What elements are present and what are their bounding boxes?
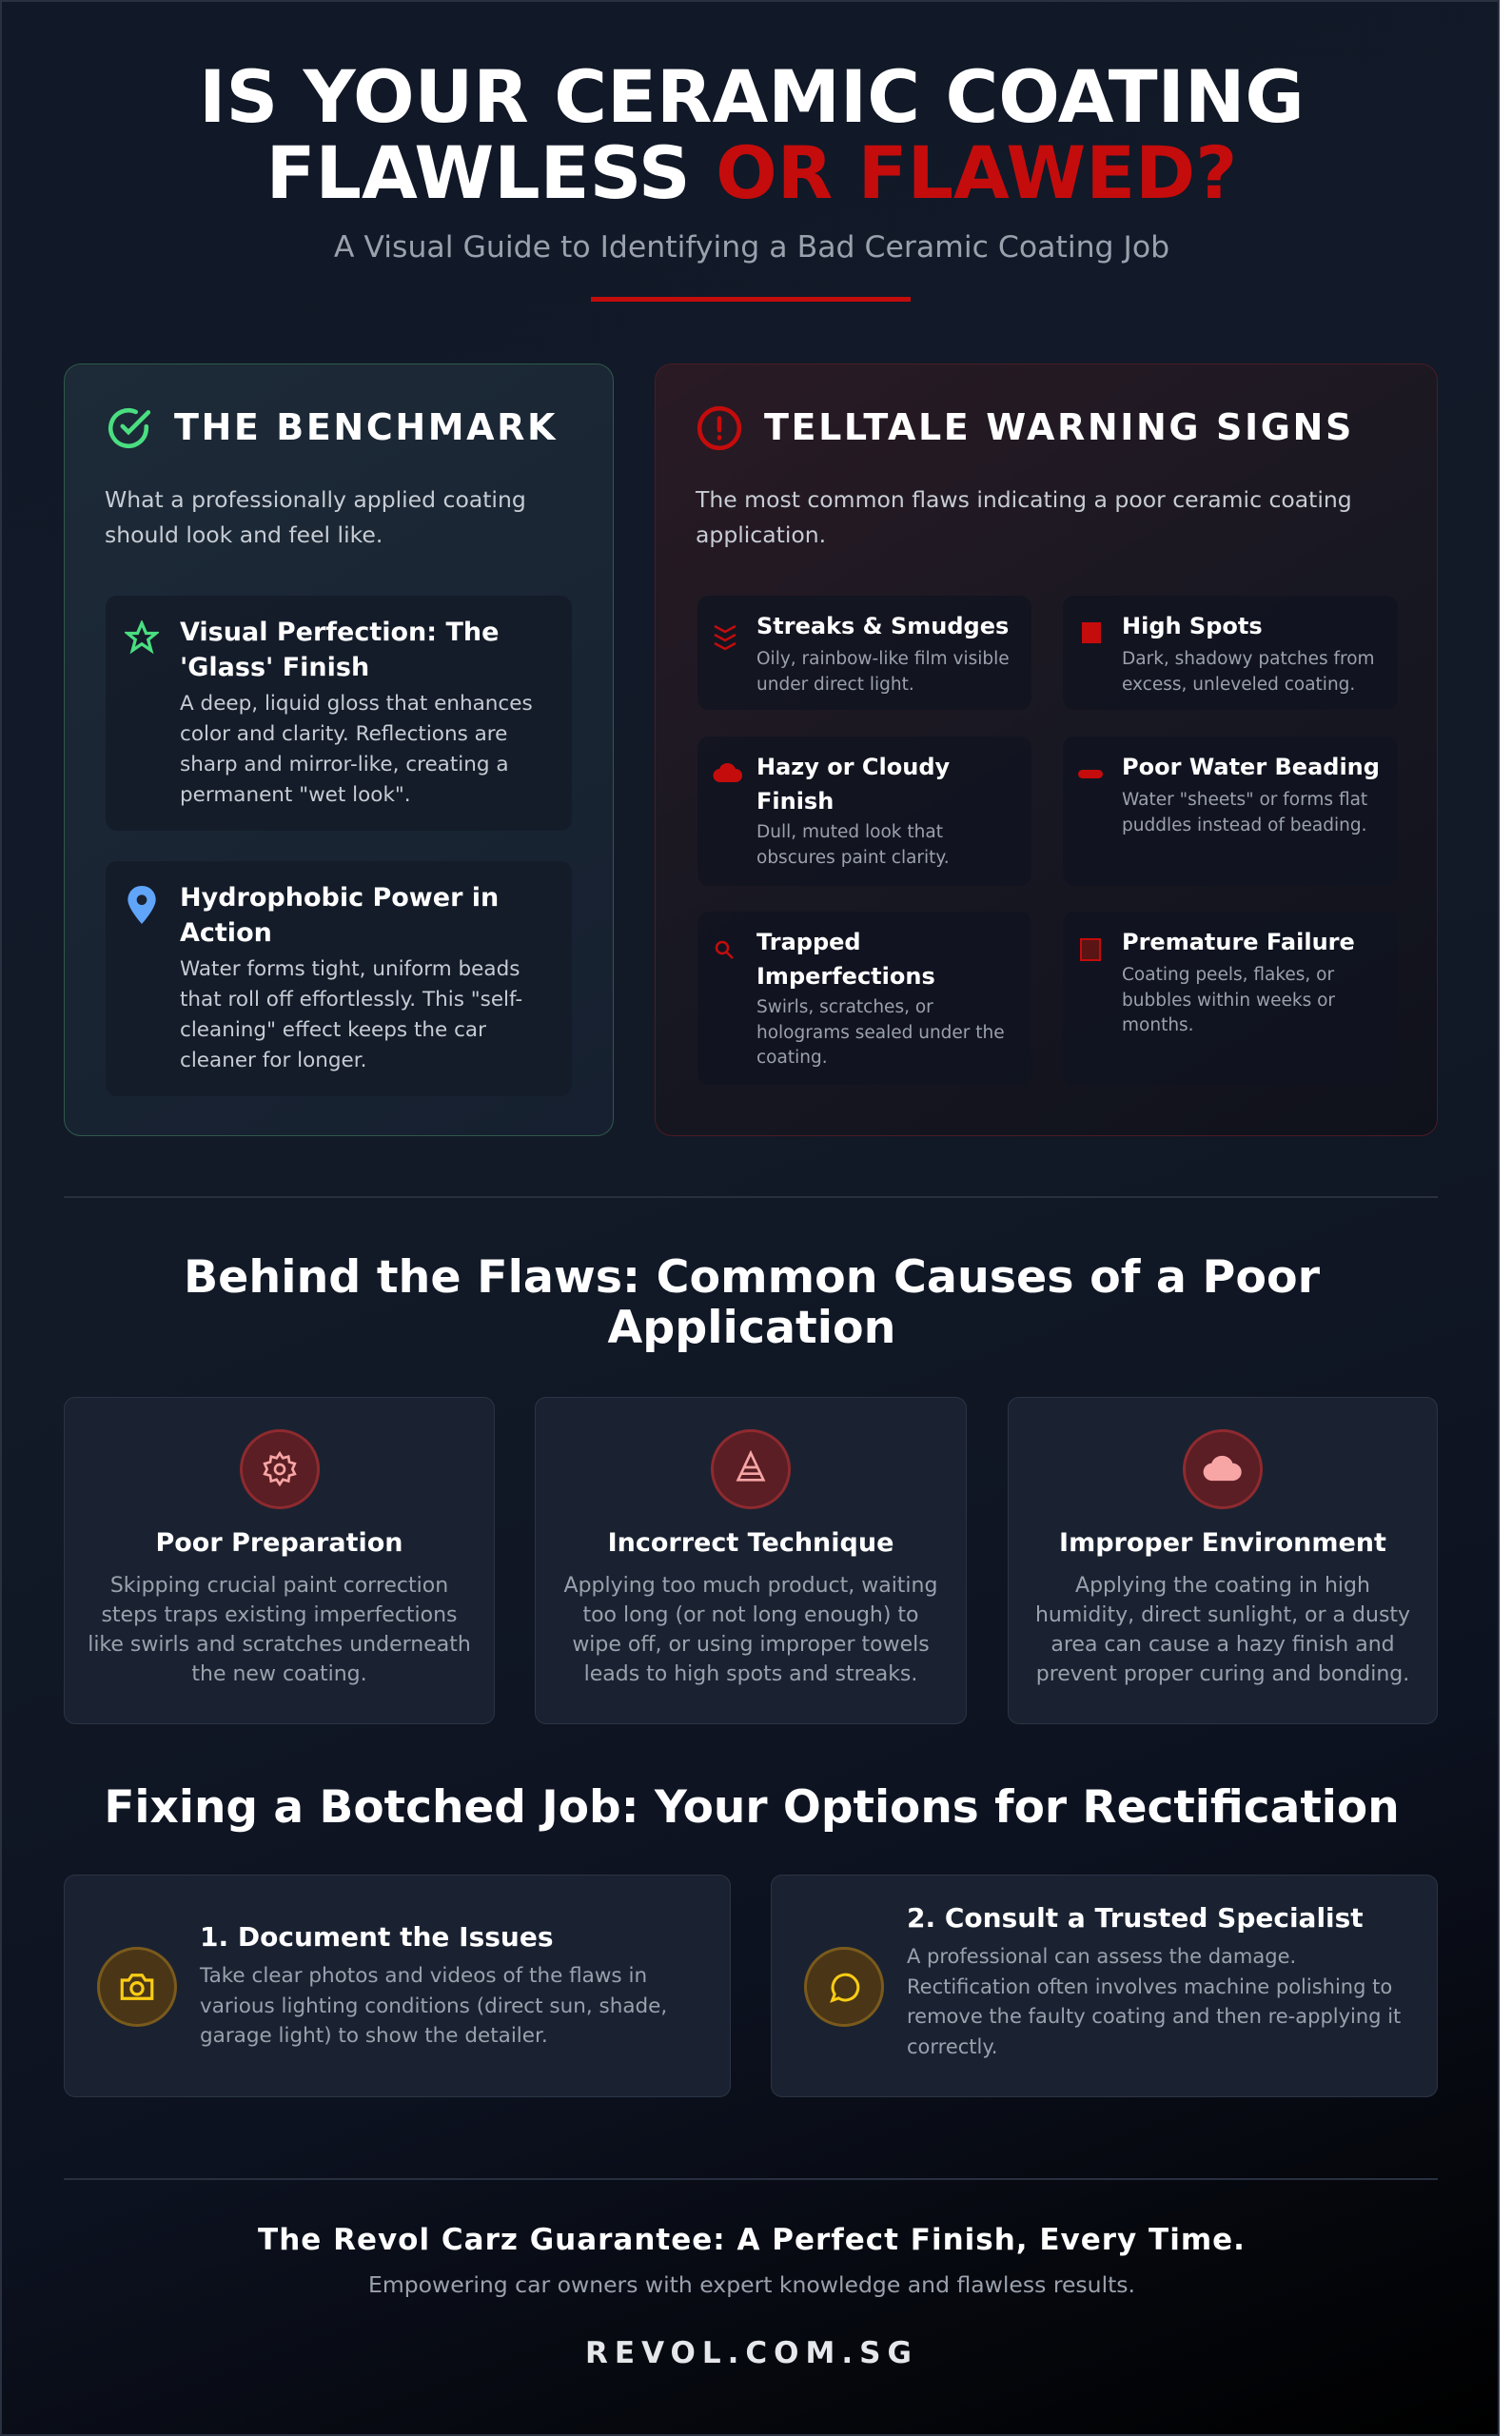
heading: causes: Application bbox=[607, 1302, 895, 1354]
cause: poor preparation bbox=[64, 1397, 495, 1724]
icon: gear bbox=[240, 1429, 320, 1509]
fix: consult: A professional can assess the damage. Rectification often involves machine polishing to remove the faulty coating and then re-applying it correctly. bbox=[907, 1945, 1401, 2057]
icon: magnifier bbox=[716, 940, 734, 959]
cause: improper environment: Applying the coating in high humidity, direct sunlight, or a dusty area can cause a hazy finish and prevent proper curing and bonding. bbox=[1035, 1574, 1410, 1686]
warning: high spots: Dark, shadowy patches from excess, unleveled coating. bbox=[1122, 649, 1375, 695]
red underline bbox=[591, 297, 911, 302]
warning: hazy: Hazy or Cloudy Finish bbox=[756, 754, 950, 815]
icon: chat bubble bbox=[804, 1947, 884, 2027]
fix: consult: 2. Consult a Trusted Specialist bbox=[907, 1902, 1364, 1934]
cause: incorrect technique bbox=[535, 1397, 967, 1724]
icon: map pin bbox=[128, 886, 156, 924]
warning: trapped imperfections: Swirls, scratches, or holograms sealed under the coating. bbox=[756, 997, 1005, 1068]
icon: square bbox=[1082, 622, 1101, 643]
warning: water beading bbox=[1063, 737, 1398, 886]
footer: tagline: Empowering car owners with expert knowledge and flawless results. bbox=[368, 2271, 1135, 2298]
warning: trapped imperfections bbox=[697, 912, 1031, 1085]
warning: high spots bbox=[1063, 596, 1398, 710]
warning: water beading: Poor Water Beading bbox=[1122, 754, 1380, 780]
icon: outlined square bbox=[1080, 938, 1101, 961]
card: visual perfection bbox=[106, 596, 572, 831]
warning: hazy bbox=[697, 737, 1031, 886]
icon: chevrons bbox=[714, 624, 736, 651]
icon: check circle bbox=[108, 407, 150, 449]
cause: poor preparation: Skipping crucial paint correction steps traps existing imperfections like swirls and scratches underneath the new coating. bbox=[88, 1574, 471, 1686]
footer: guarantee: The Revol Carz Guarantee: A Perfect Finish, Every Time. bbox=[258, 2223, 1246, 2257]
title: FLAWLESS OR FLAWED? bbox=[266, 130, 1237, 215]
fix: consult bbox=[771, 1875, 1438, 2097]
title: IS YOUR CERAMIC COATING bbox=[199, 54, 1305, 139]
title bbox=[199, 54, 1305, 215]
cause: poor preparation: Poor Preparation bbox=[155, 1528, 403, 1558]
icon: camera bbox=[97, 1947, 177, 2027]
warning: streaks: Oily, rainbow-like film visible under direct light. bbox=[756, 649, 1010, 695]
icon: alert circle bbox=[697, 405, 742, 451]
heading: fixing: Fixing a Botched Job: Your Options for Rectification bbox=[104, 1781, 1400, 1834]
icon: cloud bbox=[714, 763, 742, 782]
panel: warning signs bbox=[655, 363, 1438, 1136]
icon: cloud bbox=[1183, 1429, 1263, 1509]
warning: high spots: High Spots bbox=[1122, 613, 1263, 639]
card: hydrophobic: Water forms tight, uniform beads that roll off effortlessly. This "self-cleaning" effect keeps the car cleaner for longer. bbox=[180, 957, 522, 1072]
card: visual perfection: A deep, liquid gloss that enhances color and clarity. Reflections are sharp and mirror-like, creating a permanent "wet look". bbox=[180, 692, 533, 807]
heading: causes bbox=[184, 1251, 1320, 1354]
subtitle: A Visual Guide to Identifying a Bad Ceramic Coating Job bbox=[334, 230, 1169, 265]
warning: premature failure bbox=[1063, 912, 1398, 1085]
heading: causes: Behind the Flaws: Common Causes of a Poor bbox=[184, 1251, 1320, 1304]
cause: improper environment: Improper Environment bbox=[1059, 1528, 1386, 1558]
description: The most common flaws indicating a poor ceramic coating application. bbox=[696, 486, 1352, 548]
cause: incorrect technique: Incorrect Technique bbox=[608, 1528, 893, 1558]
warning: premature failure: Coating peels, flakes, or bubbles within weeks or months. bbox=[1122, 965, 1335, 1035]
panel: benchmark bbox=[64, 363, 614, 1136]
description: What a professionally applied coating should look and feel like. bbox=[105, 486, 526, 548]
fix: document: 1. Document the Issues bbox=[200, 1921, 554, 1953]
footer: website: REVOL.COM.SG bbox=[585, 2336, 918, 2370]
warning: trapped imperfections: Trapped Imperfections bbox=[756, 929, 935, 990]
fix: document bbox=[64, 1875, 731, 2097]
warning: premature failure: Premature Failure bbox=[1122, 929, 1355, 955]
warning: streaks: Streaks & Smudges bbox=[756, 613, 1009, 639]
icon: star bbox=[125, 620, 159, 655]
card: hydrophobic bbox=[106, 861, 572, 1096]
warning: hazy: Dull, muted look that obscures paint clarity. bbox=[756, 822, 950, 868]
warning: streaks bbox=[697, 596, 1031, 710]
icon: triangle layers bbox=[711, 1429, 791, 1509]
cause: incorrect technique: Applying too much product, waiting too long (or not long enough) to wipe off, or using improper towels leads to high spots and streaks. bbox=[564, 1574, 937, 1686]
heading: warning signs: TELLTALE WARNING SIGNS bbox=[764, 406, 1354, 448]
cause: improper environment bbox=[1008, 1397, 1438, 1724]
card: hydrophobic: Hydrophobic Power in Action bbox=[180, 883, 499, 948]
warning: water beading: Water "sheets" or forms flat puddles instead of beading. bbox=[1122, 790, 1367, 835]
heading: the benchmark: THE BENCHMARK bbox=[174, 406, 558, 448]
icon: dash bbox=[1078, 770, 1103, 778]
fix: document: Take clear photos and videos of the flaws in various lighting conditions (direct sun, shade, garage light) to show the detailer. bbox=[200, 1964, 667, 2048]
card: visual perfection: Visual Perfection: The 'Glass' Finish bbox=[180, 618, 499, 682]
